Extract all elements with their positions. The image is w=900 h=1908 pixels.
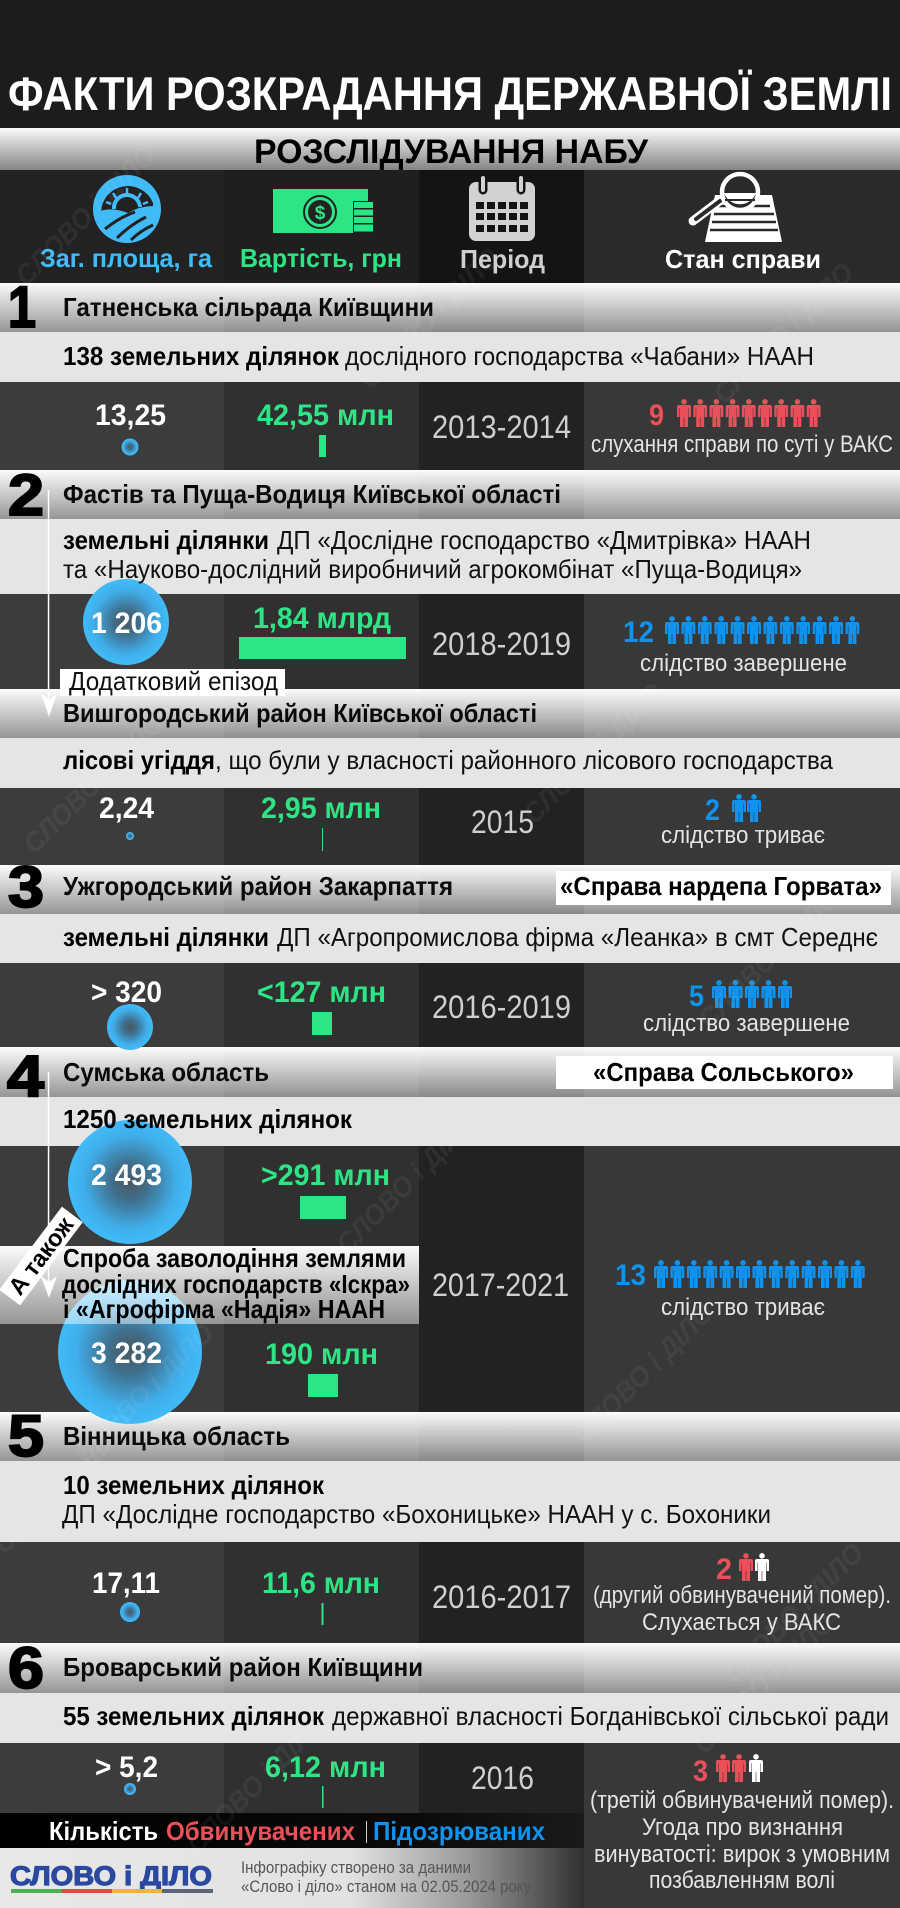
section 2 status: слідство завершене [640, 650, 847, 677]
section 2 heading: 2 [8, 463, 44, 528]
source note: «Слово і діло» станом на 02.05.2024 року [241, 1877, 531, 1896]
section 2 status: 12 [623, 616, 654, 649]
bubble: 320 ha [107, 1004, 153, 1050]
section 5 area: 17,11 [92, 1567, 160, 1600]
section 1 status [591, 399, 893, 458]
section 5 description: ДП «Дослідне господарство «Бохоницьке» НААН у с. Бохоники [62, 1499, 771, 1529]
additional episode section [60, 666, 833, 851]
column header: value: Вартість, грн [240, 243, 402, 273]
bubble: 3 282 ha [58, 1280, 202, 1424]
section 2 description: ДП «Дослідне господарство «Дмитрівка» НААН [277, 525, 811, 555]
column header: value [240, 189, 402, 273]
bubble: 1 206 ha [83, 579, 169, 665]
watermarks: СЛОВО і ДІЛО [180, 1707, 333, 1860]
section 3 area: > 320 [91, 976, 162, 1009]
subtitle: РОЗСЛІДУВАННЯ НАБУ [254, 133, 649, 171]
label: also: А також [4, 1211, 80, 1300]
section 2 description [63, 525, 811, 584]
column header: case status: Стан справи [665, 244, 821, 274]
section 6 status: 3 [693, 1755, 708, 1788]
section 1 description: 138 земельних ділянок [63, 341, 340, 371]
section 6 value: 6,12 млн [265, 1751, 386, 1784]
section 1 heading: 1 [8, 275, 36, 340]
section 4 second value: 190 млн [265, 1338, 378, 1371]
label: additional episode: Додатковий епізод [69, 666, 278, 696]
section 5 area [92, 1567, 160, 1622]
section 2 status [623, 616, 859, 677]
section 6 area: > 5,2 [95, 1751, 158, 1784]
section 4 status: слідство триває [661, 1294, 825, 1321]
section 3 status: слідство завершене [643, 1010, 850, 1037]
column header: area [40, 175, 213, 273]
section 2 area: 1 206 [91, 607, 162, 640]
section 1 area: 13,25 [95, 399, 166, 432]
section 2 value: 1,84 млрд [253, 602, 391, 635]
section 3 heading: 3 [8, 855, 44, 920]
additional episode area [99, 792, 154, 840]
additional episode area: 2,24 [99, 792, 154, 825]
watermarks: СЛОВО і ДІЛО [567, 1297, 720, 1450]
section 1 value: 42,55 млн [257, 399, 394, 432]
section 5 status: Слухається у ВАКС [642, 1609, 841, 1636]
additional episode value [261, 792, 381, 851]
section 5 value: 11,6 млн [262, 1567, 380, 1600]
section 4 description: 1250 земельних ділянок [63, 1104, 353, 1134]
icon: calendar [469, 178, 535, 241]
source note: Інфографіку створено за даними [241, 1858, 471, 1877]
sub-episode band: і «Агрофірма «Надія» НААН [63, 1294, 385, 1324]
section 4 first area: 2 493 [91, 1159, 162, 1192]
icon: field and sun [93, 175, 161, 243]
section 4 first value [261, 1159, 390, 1219]
section 1 value [257, 399, 394, 457]
arrow: from section 2 to additional episode [41, 490, 57, 717]
section 5 description [62, 1470, 771, 1529]
section 5 status: 2 [716, 1553, 732, 1586]
additional episode period: 2015 [471, 804, 534, 840]
case label: Solsky case: «Справа Сольського» [593, 1057, 854, 1087]
section 2 description: та «Науково-дослідний виробничий агрокомбінат «Пуща-Водиця» [63, 554, 802, 584]
section 5 heading [8, 1404, 290, 1469]
section 1 status: 9 [649, 399, 664, 432]
section 3 description: земельні ділянки [63, 922, 269, 952]
section 2 description: земельні ділянки [63, 525, 269, 555]
legend: number of accused and suspects: Обвинувачених [166, 1816, 355, 1846]
section 4 heading: 4 [7, 1044, 44, 1109]
section 1 heading: Гатненська сільрада Київщини [63, 292, 434, 322]
watermarks: СЛОВО і ДІЛО [353, 242, 506, 395]
bubble: 2 493 ha [68, 1120, 192, 1244]
section 3 value [257, 976, 386, 1035]
column header: case status [665, 174, 821, 274]
section 2 period: 2018-2019 [432, 626, 571, 662]
footer [0, 1848, 584, 1908]
legend: number of accused and suspects: Кількість [49, 1816, 158, 1846]
section 1 period: 2013-2014 [432, 409, 571, 445]
watermarks: СЛОВО і ДІЛО [330, 1107, 483, 1260]
watermarks: СЛОВО і ДІЛО [707, 257, 860, 410]
section 6 description: 55 земельних ділянок [63, 1701, 325, 1731]
icon: money: $ [315, 203, 326, 224]
section 4 heading [7, 1044, 269, 1109]
section 4 period: 2017-2021 [432, 1267, 569, 1303]
section 3 period: 2016-2019 [432, 989, 571, 1025]
section 1 description: дослідного господарства «Чабани» НААН [345, 341, 814, 371]
section 2 [8, 463, 859, 677]
section 5 heading: Вінницька область [63, 1421, 290, 1451]
section 4 second area: 3 282 [91, 1337, 162, 1370]
watermarks: СЛОВО і ДІЛО [687, 1607, 840, 1760]
watermarks: СЛОВО і ДІЛО [692, 882, 845, 1035]
section 2 heading: Фастів та Пуща-Водиця Київської області [63, 479, 561, 509]
legend: number of accused and suspects: Підозрюваних [373, 1816, 545, 1846]
additional episode value: 2,95 млн [261, 792, 381, 825]
section 4 status [615, 1259, 865, 1321]
section 3 status: 5 [689, 980, 704, 1013]
section 5 description: 10 земельних ділянок [63, 1470, 325, 1500]
section 1 heading [8, 275, 434, 340]
section 5 status [593, 1553, 891, 1636]
section 1 area [95, 399, 166, 456]
icon: magnifier over document [693, 174, 782, 242]
section 3 [8, 855, 891, 1037]
section 4 heading: Сумська область [63, 1057, 269, 1087]
sub-episode band: дослідних господарств «Іскра» [62, 1269, 410, 1299]
additional episode description: , що були у власності районного лісового господарства [215, 745, 833, 775]
section 6 heading: Броварський район Київщини [63, 1652, 423, 1682]
column header: area: Заг. площа, га [40, 243, 213, 273]
watermarks: СЛОВО і ДІЛО [67, 1317, 220, 1470]
section 3 value: <127 млн [257, 976, 386, 1009]
section 6 heading [8, 1636, 423, 1701]
source note [241, 1858, 531, 1896]
column header: period [460, 178, 545, 274]
additional episode status [661, 794, 825, 849]
section 4 second value [265, 1338, 378, 1397]
icon: money [273, 189, 374, 233]
section 6 description [63, 1701, 889, 1731]
section 3 heading [8, 855, 453, 920]
section 6 status: Угода про визнання [642, 1814, 843, 1841]
section 5 period: 2016-2017 [432, 1579, 571, 1615]
sub-episode band: Спроба заволодіння землями [63, 1243, 406, 1273]
section 3 status [643, 980, 850, 1037]
section 6 value [265, 1751, 386, 1808]
section 6 heading: 6 [8, 1636, 44, 1701]
section 2 heading [8, 463, 561, 528]
section 3 heading: Ужгородський район Закарпаття [63, 871, 453, 901]
watermarks: СЛОВО і ДІЛО [17, 707, 170, 860]
section 4 [0, 1044, 893, 1397]
arrow: within section 4 [41, 1072, 57, 1298]
section 6 status: позбавленням волі [649, 1867, 835, 1894]
section 4 first value: >291 млн [261, 1159, 390, 1192]
watermarks: СЛОВО і ДІЛО [517, 677, 670, 830]
sub-episode band [0, 1243, 419, 1324]
section 1 description [63, 341, 814, 371]
section 5 value [262, 1567, 380, 1625]
section 6 status [590, 1754, 894, 1894]
section 1 [8, 275, 893, 458]
column header: period: Період [460, 244, 545, 274]
legend: number of accused and suspects [0, 1813, 584, 1848]
section 5 [8, 1404, 891, 1636]
additional episode heading: Вишгородський район Київської області [63, 698, 537, 728]
section 6 [8, 1636, 894, 1894]
logo: Slovo i Dilo: СЛОВО і ДІЛО [10, 1861, 212, 1891]
section 4 status: 13 [615, 1259, 646, 1292]
watermarks: СЛОВО і ДІЛО [9, 139, 162, 292]
additional episode status: слідство триває [661, 822, 825, 849]
additional episode status: 2 [705, 794, 720, 827]
watermarks: СЛОВО і ДІЛО [717, 1537, 870, 1690]
section 6 period: 2016 [471, 1760, 534, 1796]
case label: Horvat case: «Справа нардепа Горвата» [560, 871, 882, 901]
section 5 heading: 5 [8, 1404, 44, 1469]
section 2 value [239, 602, 406, 659]
additional episode description: лісові угіддя [63, 745, 215, 775]
